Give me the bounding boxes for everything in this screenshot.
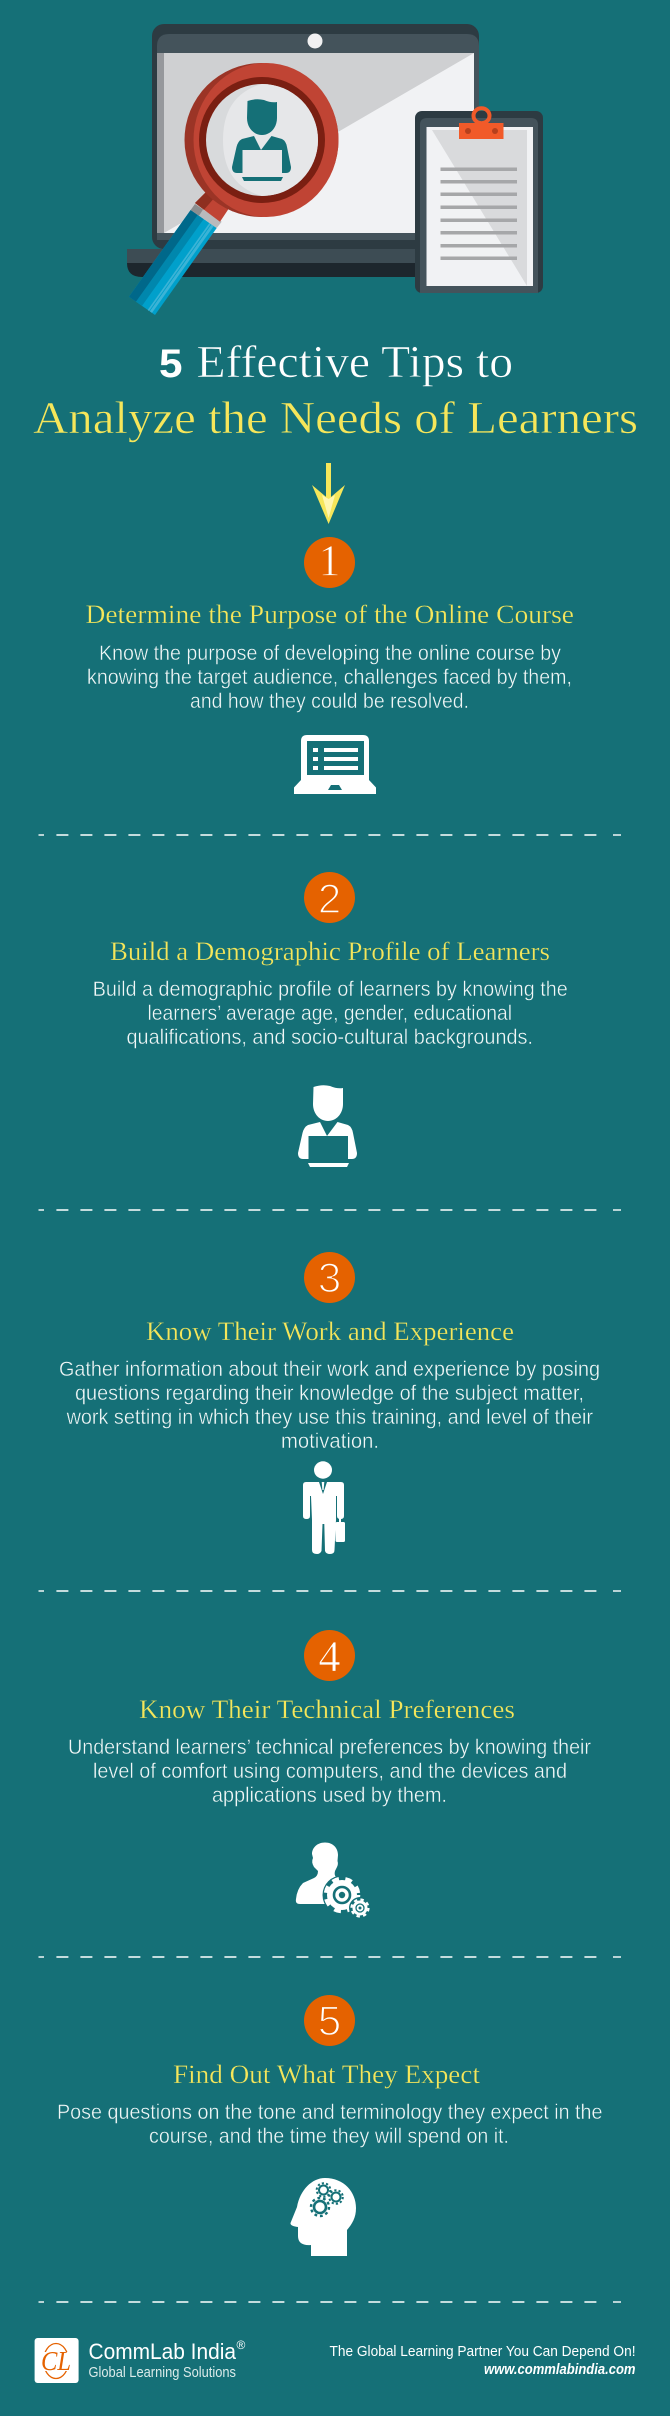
body text 3: motivation. bbox=[281, 1430, 379, 1453]
body text 2: qualifications, and socio-cultural backgrounds. bbox=[126, 1026, 533, 1049]
icon: person with laptop bbox=[298, 1085, 357, 1167]
icon: person with gears bbox=[296, 1842, 371, 1919]
title: 5 bbox=[159, 342, 182, 386]
number badge 2 bbox=[304, 872, 355, 923]
tip 4 bbox=[68, 1630, 591, 1919]
body text 4: level of comfort using computers, and the devices and bbox=[93, 1760, 567, 1783]
body text 1 bbox=[87, 642, 572, 713]
body text 4: applications used by them. bbox=[212, 1784, 447, 1807]
laptop bbox=[127, 24, 479, 277]
tip 2 bbox=[93, 872, 568, 1167]
body text 2: learners’ average age, gender, educational bbox=[148, 1002, 512, 1025]
number badge 4: 4 bbox=[318, 1632, 340, 1681]
body text 5: course, and the time they will spend on it. bbox=[149, 2125, 509, 2148]
tip 3 bbox=[59, 1252, 600, 1554]
heading 5: Find Out What They Expect bbox=[173, 2059, 481, 2089]
company name bbox=[88, 2338, 246, 2381]
body text 3: Gather information about their work and experience by posing bbox=[59, 1358, 600, 1381]
tagline and website: www.commlabindia.com bbox=[484, 2361, 636, 2378]
body text 3 bbox=[59, 1358, 600, 1453]
number badge 1 bbox=[304, 536, 355, 588]
magnifying glass handle bbox=[129, 190, 230, 315]
body text 3: work setting in which they use this training, and level of their bbox=[66, 1406, 593, 1429]
heading 2: Build a Demographic Profile of Learners bbox=[110, 936, 550, 966]
body text 3: questions regarding their knowledge of the subject matter, bbox=[75, 1382, 584, 1405]
number badge 1: 1 bbox=[318, 536, 340, 585]
logo mark bbox=[35, 2338, 79, 2383]
body text 1: Know the purpose of developing the online course by bbox=[99, 642, 561, 665]
arrow pointing down bbox=[312, 463, 345, 524]
company name: ® bbox=[236, 2338, 246, 2352]
company name: CommLab India bbox=[88, 2339, 237, 2364]
body text 4: Understand learners’ technical preferences by knowing their bbox=[68, 1736, 591, 1759]
icon: head with gears bbox=[290, 2178, 356, 2256]
heading 3: Know Their Work and Experience bbox=[146, 1316, 514, 1346]
number badge 4 bbox=[304, 1630, 355, 1681]
heading 1: Determine the Purpose of the Online Course bbox=[86, 599, 574, 629]
body text 4 bbox=[68, 1736, 591, 1807]
number badge 3: 3 bbox=[318, 1254, 341, 1301]
clipboard bbox=[415, 108, 543, 293]
number badge 5 bbox=[304, 1995, 355, 2046]
title: Analyze the Needs of Learners bbox=[33, 393, 638, 443]
body text 1: and how they could be resolved. bbox=[190, 690, 469, 713]
tagline and website: The Global Learning Partner You Can Depend On! bbox=[330, 2343, 636, 2360]
body text 5: Pose questions on the tone and terminology they expect in the bbox=[57, 2101, 602, 2124]
body text 2 bbox=[93, 978, 568, 1049]
tagline and website bbox=[330, 2343, 636, 2378]
body text 1: knowing the target audience, challenges faced by them, bbox=[87, 666, 572, 689]
footer bbox=[35, 2338, 636, 2383]
magnifying glass lens and ring bbox=[184, 63, 338, 217]
body text 2: Build a demographic profile of learners by knowing the bbox=[93, 978, 568, 1001]
logo mark: CL bbox=[41, 2346, 71, 2376]
company name: Global Learning Solutions bbox=[88, 2364, 236, 2381]
number badge 5: 5 bbox=[318, 1997, 341, 2044]
person inside lens bbox=[232, 99, 291, 181]
heading 4: Know Their Technical Preferences bbox=[139, 1694, 515, 1724]
number badge 3 bbox=[304, 1252, 355, 1303]
title: Effective Tips to bbox=[196, 337, 513, 387]
hero illustration: laptop, magnifier and clipboard bbox=[127, 24, 543, 315]
icon: laptop with list bbox=[294, 735, 376, 794]
number badge 2: 2 bbox=[318, 875, 341, 922]
tip 1 bbox=[86, 536, 574, 794]
body text 5 bbox=[57, 2101, 602, 2148]
tip 5 bbox=[57, 1995, 602, 2256]
title bbox=[33, 337, 638, 443]
icon: businessman with briefcase bbox=[303, 1461, 345, 1554]
